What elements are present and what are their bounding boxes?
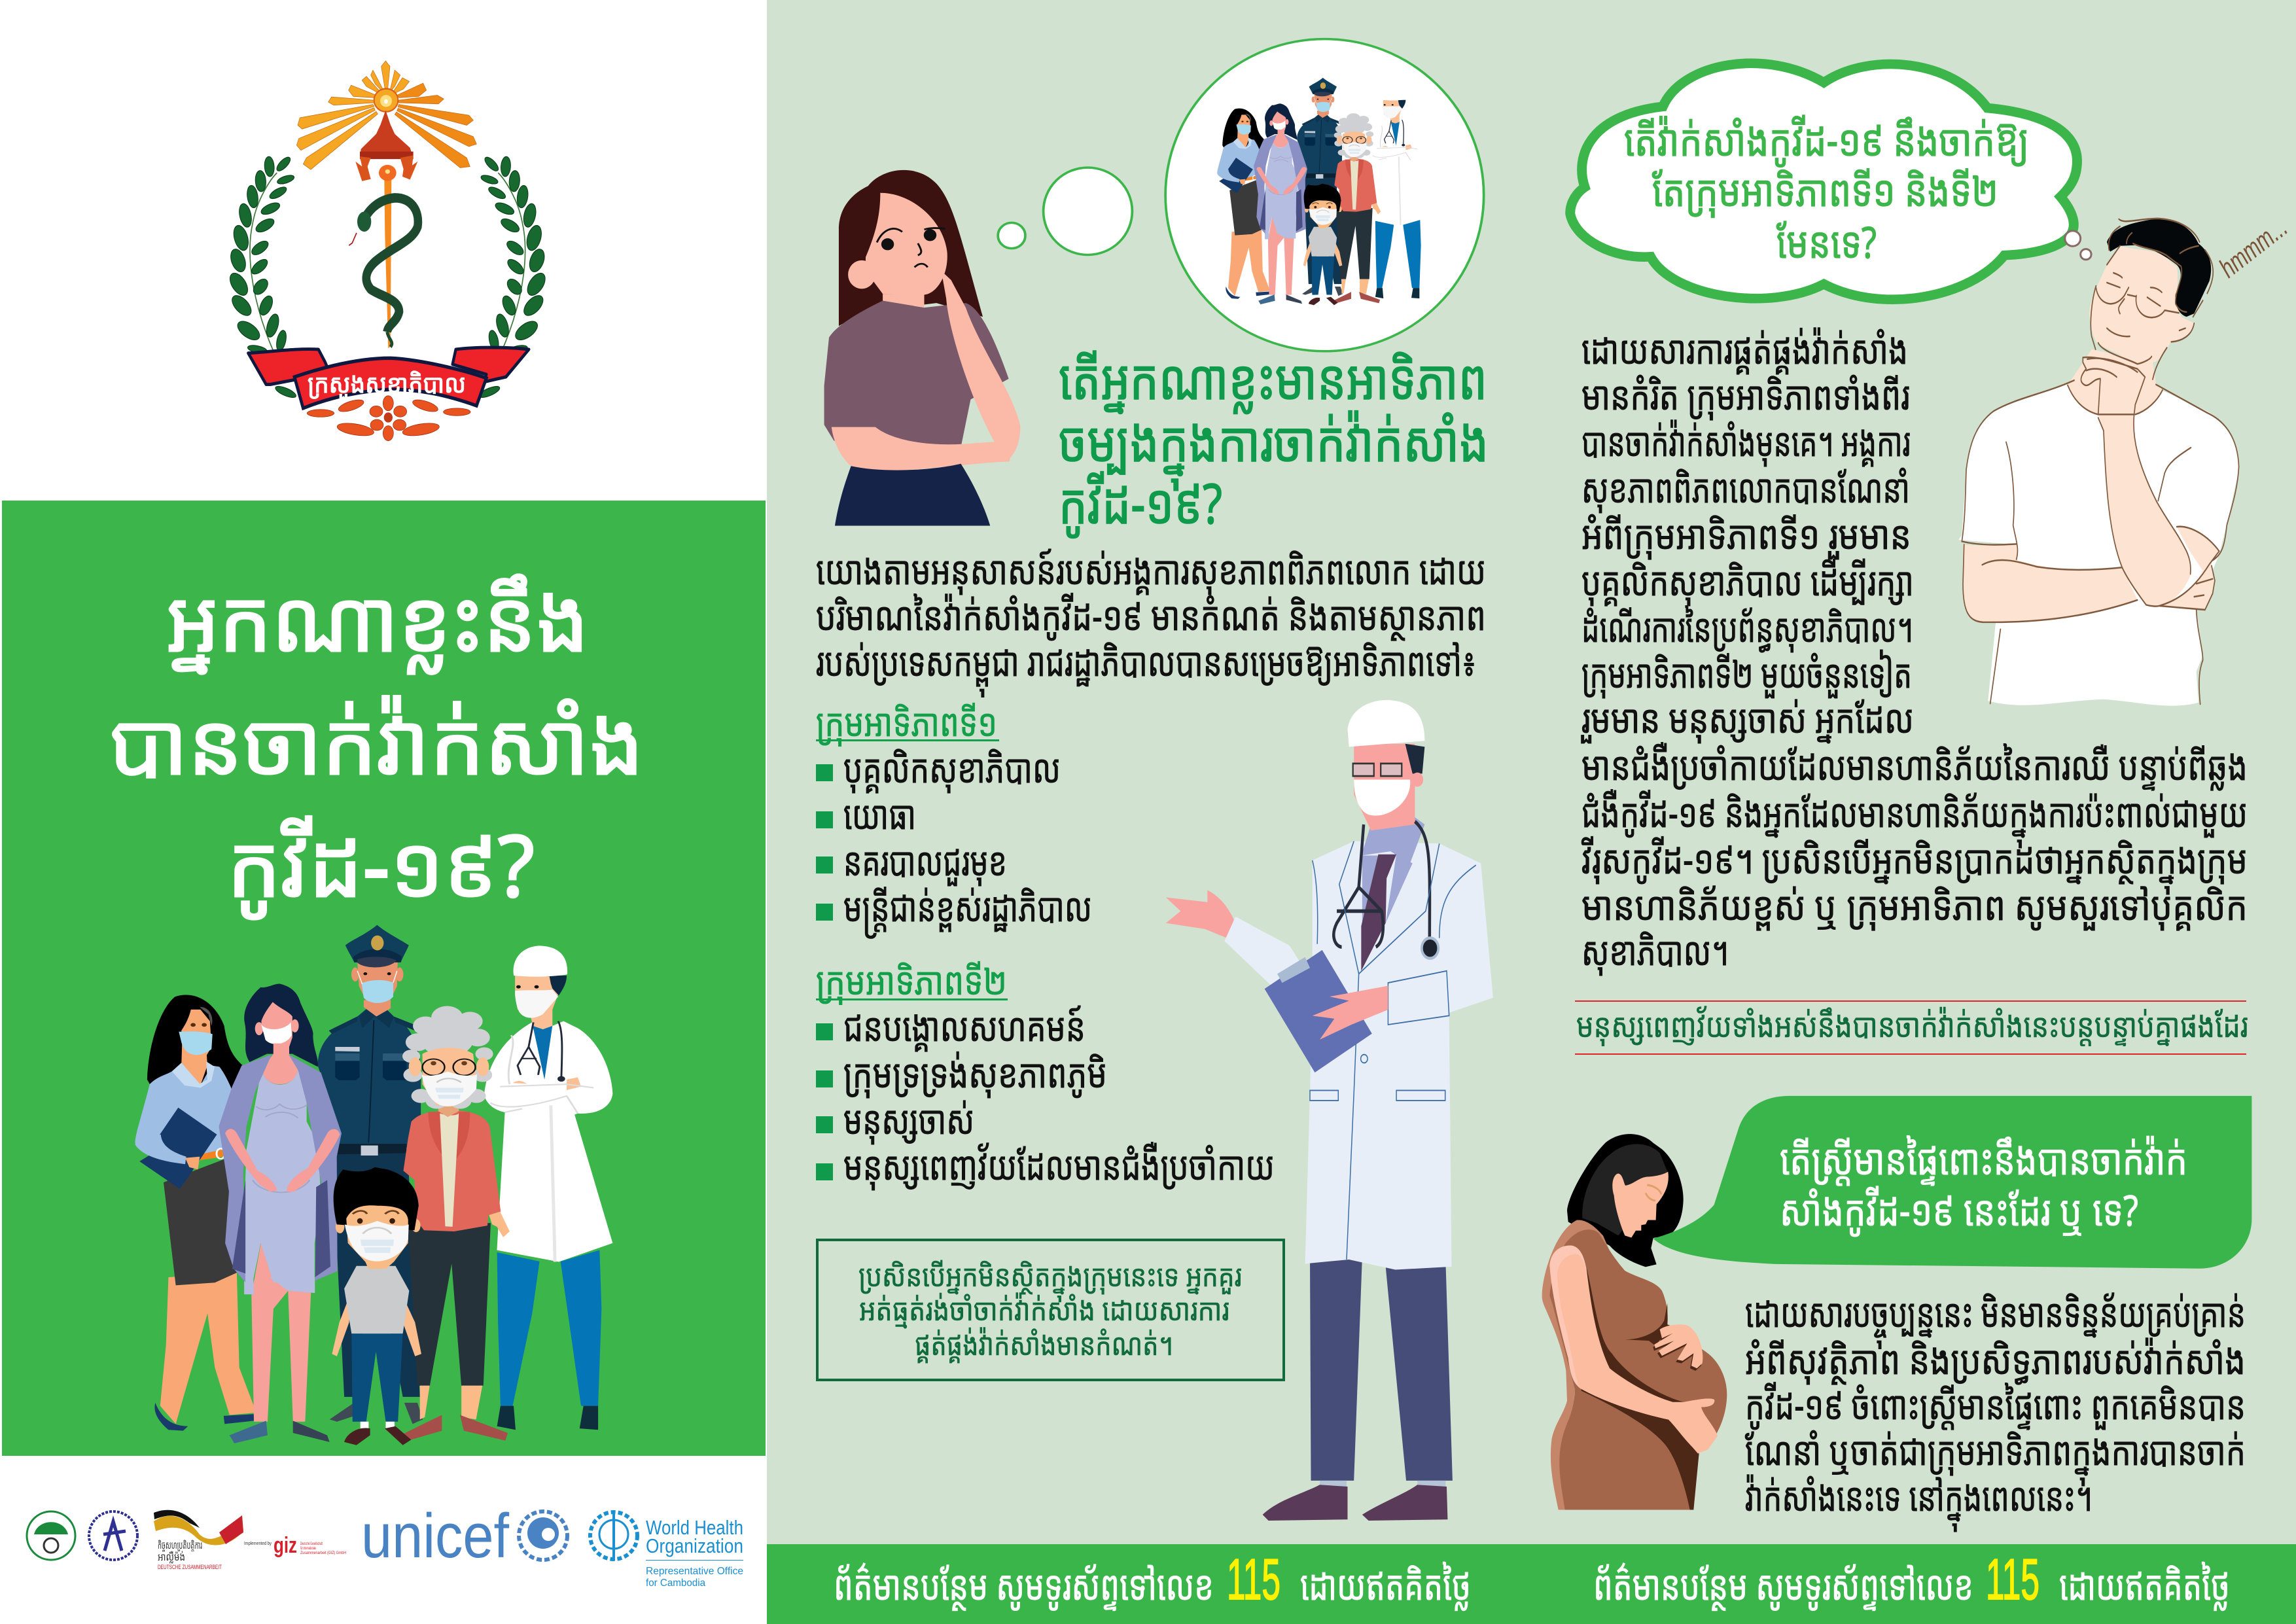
text block: intro <box>816 542 1486 697</box>
text block: answer part 1: ដោយសារការផ្គត់ផ្គង់វ៉ាក់សាំង <box>1581 322 1908 376</box>
illustration: thinking man <box>1958 219 2239 706</box>
group 1 bullets <box>816 764 833 921</box>
footer message left <box>834 1547 1471 1612</box>
callout: limited supply note: ផ្គត់ផ្គង់វ៉ាក់សាំងមានកំណត់។ <box>915 1324 1173 1364</box>
panel: right background <box>767 0 2296 1544</box>
speech bubble question text: តើស្ត្រីមានផ្ទៃពោះនឹងបានចាក់វ៉ាក់ <box>1780 1130 2187 1187</box>
footer message right: ដោយឥតគិតថ្លៃ <box>2059 1557 2230 1612</box>
logo: German cooperation: កិច្ចសហប្រតិបត្តិការ <box>158 1538 202 1552</box>
footer hotline bar <box>767 1544 2296 1624</box>
speech bubble question text: សាំងកូវីដ-១៩ នេះដែរ ឬ ទេ? <box>1780 1181 2138 1238</box>
text block: answer part 1: អំពីក្រុមអាទិភាពទី១ រួមមាន <box>1581 507 1911 561</box>
group 2 bullets <box>816 1023 833 1180</box>
text block: answer part 1: រួមមាន មនុស្សចាស់ អ្នកដែល <box>1581 691 1914 745</box>
partner logos <box>27 1501 743 1589</box>
title: អ្នកណាខ្លះនឹង <box>166 561 589 677</box>
illustration: pregnant woman <box>1542 1134 1727 1509</box>
panel: left cover <box>2 61 766 1589</box>
logo: giz: giz <box>274 1533 297 1558</box>
logo: giz: für Internationale <box>300 1546 316 1551</box>
panel: green cover block <box>2 501 766 1456</box>
logo: giz: Implemented by <box>244 1542 272 1546</box>
heading: who has priority: តើអ្នកណាខ្លះមានអាទិភាព <box>1059 340 1487 415</box>
illustration: group of masked people <box>135 925 612 1445</box>
text block: intro: របស់ប្រទេសកម្ពុជា រាជរដ្ឋាភិបាលបានសម្រេចឱ្យអាទិភាពទៅ៖ <box>816 634 1476 697</box>
logo ribbon text: ក្រសួងសុខាភិបាល <box>308 366 466 400</box>
text block: pregnancy answer <box>1745 1285 2246 1531</box>
cloud question text: មែនទេ? <box>1776 212 1877 271</box>
footer message right: 115 <box>1986 1547 2040 1612</box>
illustration: doctor <box>1166 700 1493 1521</box>
text block: answer part 1: បុគ្គលិកសុខាភិបាល ដើម្បីរក្សា <box>1581 554 1914 607</box>
text block: answer part 1: ដំណើរការនៃប្រព័ន្ធសុខាភិបាល។ <box>1581 600 1913 654</box>
group 2 items: មនុស្សចាស់ <box>843 1092 974 1146</box>
heading: who has priority: ចម្បងក្នុងការចាក់វ៉ាក់សាំង <box>1059 402 1489 491</box>
footer message right <box>1593 1547 2230 1612</box>
logo: blue circle <box>89 1511 137 1560</box>
footer message right: ព័ត៌មានបន្ថែម សូមទូរស័ព្ទទៅលេខ <box>1593 1557 1973 1612</box>
logo: Ministry of Health emblem <box>226 61 548 441</box>
text block: answer part 1: មានកំរិត ក្រុមអាទិភាពទាំងពីរ <box>1581 368 1910 421</box>
heading: who has priority: កូវីដ-១៩? <box>1059 465 1222 540</box>
title: បានចាក់វ៉ាក់សាំង <box>109 684 644 800</box>
text block: answer part 1: សុខភាពពិភពលោកបានណែនាំ <box>1581 461 1910 514</box>
panel: pregnant women question <box>1542 1096 2252 1531</box>
logo: German cooperation: DEUTSCHE ZUSAMMENARBEIT <box>158 1564 222 1570</box>
cloud question text <box>1624 110 2029 271</box>
list: priority group 1 <box>816 696 1092 939</box>
group 2 items: ក្រុមទ្រទ្រង់សុខភាពភូមិ <box>843 1046 1107 1099</box>
group 2 heading: ក្រុមអាទិភាពទី២ <box>816 954 1007 1006</box>
speech bubble <box>1653 1096 2252 1269</box>
title <box>109 561 644 922</box>
logo: World Health Organization: World Health <box>646 1516 743 1539</box>
footer message left: 115 <box>1227 1547 1280 1612</box>
text block: intro: យោងតាមអនុសាសន៍របស់អង្គការសុខភាពពិភពលោក ដោយ <box>816 542 1486 596</box>
panel: priority question <box>816 39 1493 1521</box>
cloud question text: តើវ៉ាក់សាំងកូវីដ-១៩ នឹងចាក់ឱ្យ <box>1624 110 2029 169</box>
logo: World Health Organization: Organization <box>646 1534 743 1557</box>
thought bubbles <box>998 39 1484 351</box>
illustration: thinking woman <box>824 170 1021 525</box>
logo: World Health Organization: for Cambodia <box>646 1578 705 1589</box>
callout: limited supply note: ប្រសិនបើអ្នកមិនស្ថិតក្នុងក្រុមនេះទេ អ្នកគួរ <box>858 1255 1242 1302</box>
callout: limited supply note: អត់ធ្មត់រង់ចាំចាក់វ៉ាក់សាំង ដោយសារការ <box>859 1289 1229 1330</box>
speech bubble question text <box>1780 1130 2187 1238</box>
group 2 items: មនុស្សពេញវ័យដែលមានជំងឺប្រចាំកាយ <box>843 1138 1275 1192</box>
footer message left: ដោយឥតគិតថ្លៃ <box>1300 1557 1471 1612</box>
illustration: people inside thought bubble <box>1217 78 1426 305</box>
group 2 items: ជនបង្គោលសហគមន៍ <box>843 999 1086 1053</box>
text block: answer part 2 <box>1581 738 2248 977</box>
group 1 items <box>843 741 1092 939</box>
footer message left: ព័ត៌មានបន្ថែម សូមទូរស័ព្ទទៅលេខ <box>834 1557 1214 1612</box>
logo: World Health Organization <box>590 1511 743 1589</box>
group 1 items: មន្ត្រីជាន់ខ្ពស់រដ្ឋាភិបាល <box>843 879 1092 939</box>
logo: giz <box>244 1533 346 1558</box>
group 1 items: យោធា <box>843 787 916 841</box>
list: priority group 2 <box>816 954 1275 1192</box>
group 1 items: នគរបាលជួរមុខ <box>843 834 1007 887</box>
text block: pregnancy answer: វ៉ាក់សាំងនេះទេ នៅក្នុងពេលនេះ។ <box>1745 1469 2093 1531</box>
text block: intro: បរិមាណនៃវ៉ាក់សាំងកូវីដ-១៩ មានកំណត់ និងតាមស្ថានភាព <box>816 588 1486 642</box>
logo: community circle <box>27 1511 75 1560</box>
group 1 items: បុគ្គលិកសុខាភិបាល <box>843 741 1061 794</box>
heading: who has priority <box>1059 340 1489 540</box>
text block: answer part 1: ក្រុមអាទិភាពទី២ មួយចំនួនទៀត <box>1581 646 1912 699</box>
text block: answer part 1: បានចាក់វ៉ាក់សាំងមុនគេ។ អង្គការ <box>1581 414 1911 468</box>
text block: answer part 2: សុខាភិបាល។ <box>1581 923 1729 977</box>
logo: giz: Deutsche Gesellschaft <box>300 1542 323 1546</box>
title: កូវីដ-១៩? <box>227 806 535 922</box>
callout: limited supply note <box>817 1240 1284 1380</box>
panel: only groups one and two question <box>1570 63 2293 1055</box>
logo: World Health Organization: Representative Office <box>646 1566 743 1577</box>
group 2 items <box>843 999 1275 1192</box>
logo: unicef: unicef <box>361 1501 509 1571</box>
cloud question text: តែក្រុមអាទិភាពទី១ និងទី២ <box>1652 160 1998 219</box>
logo: giz: Zusammenarbeit (GIZ) GmbH <box>300 1551 346 1555</box>
text block: answer part 1 <box>1581 322 1914 745</box>
cloud speech bubble <box>1570 63 2091 300</box>
logo: German cooperation: អាល្លឺម៉ង់ <box>158 1549 185 1564</box>
logo: German cooperation <box>154 1510 243 1570</box>
group 1 heading: ក្រុមអាទិភាពទី១ <box>816 696 997 747</box>
